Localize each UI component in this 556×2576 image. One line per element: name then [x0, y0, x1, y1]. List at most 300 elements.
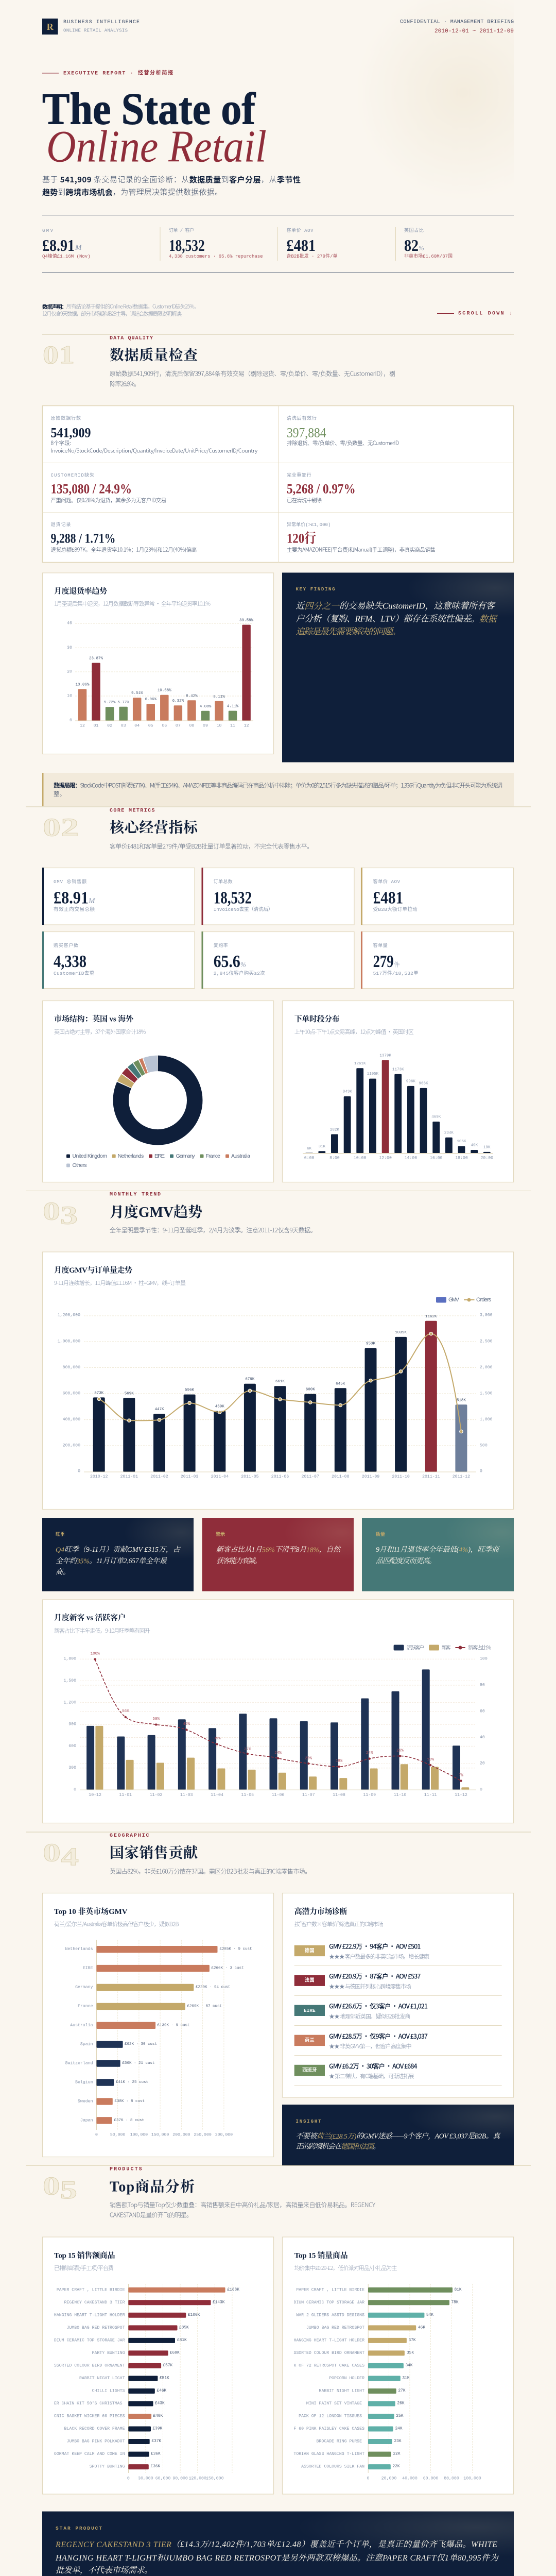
x axis labels: 200,000	[172, 2132, 190, 2137]
callout: star product	[42, 2512, 514, 2576]
bar value labels: 24K	[395, 2427, 403, 2431]
product labels: BROCADE RING PURSE	[317, 2439, 362, 2444]
left axis labels: 600,000	[63, 1391, 80, 1396]
cell: raw rows: 原始数据行数	[50, 415, 81, 421]
bar value labels: £39K	[152, 2427, 163, 2431]
active customer bars	[86, 1669, 460, 1790]
x axis labels: 03	[121, 723, 126, 728]
bar value labels: 1173K	[392, 1067, 404, 1072]
cell: raw rows	[50, 415, 257, 454]
bar value labels: £37K · 8 cust	[114, 2119, 144, 2123]
market row: EIRE: ★★ 地理邻近英国，疑似B2B批发商	[329, 2012, 410, 2020]
donut legend: Others	[72, 1162, 86, 1168]
x axis labels: 50,000	[110, 2132, 125, 2137]
product labels: JUMBO BAG RED RETROSPOT	[66, 2326, 125, 2330]
chart legend: GMV	[448, 1297, 460, 1303]
GMV value labels: 953K	[366, 1342, 375, 1346]
cell: returns: 退货记录	[50, 521, 71, 528]
stat: AOV: 客单价 AOV	[286, 227, 314, 233]
insight card: peak season: 全年约35%。11月订单2,657单全年最	[56, 1557, 167, 1565]
market row: EIRE: EIRE	[304, 2008, 316, 2013]
orders line	[97, 1332, 463, 1433]
hero summary: 基于 541,909 条交易记录的全面诊断：从数据质量到客户分层，从季节性	[42, 174, 301, 184]
metric card: GMV: £8.91	[54, 888, 89, 908]
x axis labels: 2011-11	[422, 1475, 440, 1479]
y axis labels: 40	[67, 621, 72, 625]
bar value labels: £37K	[151, 2439, 162, 2444]
market row: France	[294, 1971, 502, 1996]
callout: key finding: 追踪是最先需要解决的问题。	[296, 626, 401, 637]
section heading: 4	[61, 1842, 79, 1871]
bar value labels: £51K	[160, 2376, 169, 2380]
left axis labels: 800,000	[63, 1365, 80, 1370]
x axis labels: 90,000	[172, 2476, 188, 2481]
bar value labels: £285K · 9 cust	[219, 1947, 252, 1952]
x axis labels	[95, 2132, 233, 2137]
x axis labels: 2011-10	[392, 1475, 410, 1479]
market row: EIRE: GMV £26.6万 · 仅3客户 · AOV £1,021	[329, 2001, 428, 2011]
section heading: 02	[43, 812, 79, 841]
chart heading: 月度新客 vs 活跃客户	[54, 1613, 126, 1622]
product labels: POPCORN HOLDER	[329, 2376, 364, 2381]
x axis labels: 11-01	[119, 1793, 132, 1798]
section heading	[43, 2167, 375, 2219]
right axis labels: 500	[480, 1444, 488, 1448]
GMV value labels: 679K	[245, 1378, 255, 1382]
bar value labels: 469K	[431, 1115, 441, 1119]
insight card: quality	[362, 1518, 514, 1591]
bar value labels: £139K · 9 cust	[158, 2023, 190, 2027]
bar value labels: 10.68%	[158, 689, 171, 693]
GMV value labels: 1162K	[425, 1315, 437, 1319]
chart heading	[54, 1014, 146, 1036]
section heading: 3	[60, 1200, 78, 1229]
chart legend: Orders	[476, 1297, 491, 1303]
country labels: Australia	[70, 2023, 93, 2028]
bar value labels: 35K	[407, 2351, 414, 2355]
bar value labels: 6.32%	[172, 699, 184, 703]
bar value labels: £100K	[188, 2313, 200, 2317]
right axis labels: 0	[480, 1788, 482, 1792]
right axis labels: 2,500	[480, 1340, 493, 1344]
product labels: RABBIT NIGHT LIGHT	[319, 2388, 364, 2394]
x axis labels: 100,000	[130, 2132, 148, 2137]
section heading: 0	[43, 1196, 56, 1225]
x axis labels: 10:00	[354, 1156, 367, 1160]
title	[42, 84, 267, 172]
bar value labels: £38K · 8 cust	[114, 2099, 145, 2104]
report meta: CONFIDENTIAL · MANAGEMENT BRIEFING	[400, 20, 514, 25]
section heading: CAKESTAND是量价齐飞的明星。	[110, 2210, 193, 2219]
chart legend	[394, 1643, 491, 1652]
chart heading: 1月圣诞后集中退货，12月数据截断导致异常 · 全年平均退货率10.1%	[54, 600, 211, 608]
x axis labels: 2011-07	[301, 1475, 319, 1479]
insight card: quality: 品匹配度反而更高。	[376, 1557, 436, 1565]
market row: Netherlands: GMV £28.5万 · 仅9客户 · AOV £3,037	[329, 2031, 428, 2041]
section heading: GEOGRAPHIC	[110, 1833, 149, 1839]
x axis labels	[89, 1793, 467, 1798]
cell: raw rows: 541,909	[50, 426, 91, 440]
ratio labels: 35%	[214, 1737, 221, 1741]
product labels: HANGING HEART T-LIGHT HOLDER	[54, 2313, 125, 2317]
chart heading: 月度GMV与订单量走势	[54, 1265, 132, 1275]
metric card: GMV: M	[88, 897, 96, 905]
left axis labels: 200,000	[63, 1444, 80, 1448]
chart heading: 均价集中£0.29-£2，低价派对用品/小礼品为主	[294, 2264, 397, 2272]
x axis labels: 05	[148, 723, 153, 728]
country labels: Japan	[80, 2118, 93, 2123]
right axis labels: 1,000	[480, 1417, 493, 1422]
brand text: ONLINE RETAIL ANALYSIS	[63, 28, 128, 33]
bar value labels: 1261K	[354, 1062, 366, 1066]
x axis labels: 11-09	[363, 1793, 376, 1798]
insight card: peak season: 旺季	[56, 1531, 65, 1537]
x axis labels	[127, 2476, 224, 2481]
bars	[368, 2284, 453, 2473]
x axis labels: 11-02	[150, 1793, 162, 1798]
section heading: 销售额Top与销量Top仅少数重叠：高销售额来自中高价礼品/家居，高销量来自低价易耗品。REGENCY	[110, 2200, 375, 2209]
left axis labels: 0	[74, 1788, 76, 1792]
bar value labels: 39.58%	[239, 619, 254, 623]
ratio labels: 20%	[305, 1757, 312, 1761]
cell: missing customer id: 严重问题。仅0.28%为退货，其余多为无客户ID交易	[50, 497, 166, 504]
right axis labels: 0	[480, 1469, 482, 1473]
panel: market structure donut	[42, 1001, 274, 1182]
donut legend: Germany	[176, 1153, 195, 1159]
cell: missing customer id: 135,080 / 24.9%	[50, 481, 132, 497]
eyebrow: EXECUTIVE REPORT · 经营分析简报	[63, 69, 173, 76]
panel: top 15 by revenue	[42, 2237, 274, 2494]
GMV value labels	[94, 1315, 466, 1412]
y axis labels	[67, 621, 72, 723]
x axis labels: 06	[162, 723, 167, 728]
cell: abnormal prices: 异常单价(>£1,000)	[287, 521, 331, 528]
x axis labels: 40,000	[402, 2476, 418, 2481]
cell: abnormal prices: 120行	[287, 531, 316, 546]
insight card: warning: 新客占比从1月56%下滑至8月18%，自然	[216, 1546, 341, 1554]
insight card: quality: 质量	[376, 1531, 385, 1537]
logo mark: R	[47, 22, 54, 32]
stat: AOV	[286, 227, 338, 259]
product labels: JUMBO BAG RED RETROSPOT	[306, 2326, 364, 2330]
new customer ratio line	[94, 1658, 462, 1782]
bar value labels: £36K	[150, 2465, 161, 2469]
product labels: WAR 2 GLIDERS ASSTD DESIGNS	[296, 2313, 364, 2317]
x axis labels: 08	[189, 723, 194, 728]
chart heading: Top 15 销量商品	[294, 2250, 348, 2260]
metric card: customers: 4,338	[54, 952, 86, 971]
right axis labels: 40	[480, 1735, 485, 1740]
section heading: 0	[43, 1838, 56, 1867]
GMV value labels: 600K	[306, 1388, 315, 1392]
x axis labels: 11-04	[211, 1793, 223, 1798]
section heading: Top商品分析	[110, 2178, 195, 2195]
insight card: warning: 获客能力衰减。	[216, 1557, 262, 1565]
chart heading: 新客占比下半年走低，9-10月旺季略有回升	[54, 1626, 150, 1635]
x axis labels: 20,000	[381, 2476, 396, 2481]
brand text	[63, 20, 140, 33]
callout: insight: INSIGHT	[296, 2119, 321, 2124]
metric card: orders: 订单总数	[214, 878, 233, 885]
donut legend: EIRE	[154, 1153, 165, 1159]
x axis labels: 2011-08	[332, 1475, 350, 1479]
product labels: SPOTTY BUNTING	[90, 2465, 125, 2469]
chart heading	[54, 2250, 115, 2272]
market row: Netherlands: ★★ 非英GMV第一，但客户高度集中	[329, 2042, 412, 2050]
y axis labels: 10	[67, 693, 72, 699]
market row: France: 法国	[305, 1977, 315, 1984]
x axis labels: 6:00	[304, 1156, 315, 1160]
product labels: CHILLI LIGHTS	[92, 2388, 125, 2394]
insight card: peak season: 高。	[56, 1568, 70, 1577]
metric card: repurchase: 2,845位客户购买≥2次	[214, 970, 265, 976]
x axis labels: 12	[244, 723, 249, 728]
market row: EIRE	[294, 2001, 502, 2026]
bar value labels: £57K	[163, 2364, 173, 2368]
x axis labels: 0	[127, 2476, 130, 2481]
bar value labels: £229K · 94 cust	[196, 1986, 231, 1990]
x axis labels: 2011-04	[211, 1475, 229, 1479]
metric card: repurchase	[202, 931, 354, 989]
y axis labels: 0	[70, 718, 72, 723]
market row: Germany	[294, 1941, 502, 1966]
section heading: PRODUCTS	[110, 2167, 142, 2172]
left axis labels: 1,000,000	[58, 1340, 80, 1344]
cell: raw rows: InvoiceNo/StockCode/Description/Quantity/InvoiceDate/UnitPrice/CustomerID/Country	[50, 447, 257, 454]
panel: top 15 by volume	[282, 2237, 514, 2494]
country labels: Germany	[75, 1985, 93, 1990]
x axis labels: 2011-12	[453, 1475, 470, 1479]
section heading: DATA QUALITY	[110, 336, 153, 341]
product labels: ER CHAIN KIT 50'S CHRISTMAS	[54, 2401, 123, 2406]
GMV value labels: 573K	[94, 1391, 104, 1395]
bar value labels: £209K · 87 cust	[187, 2004, 222, 2008]
bar value labels: 4.08%	[200, 705, 212, 709]
stat: AOV: 含B2B批发 · 279件/单	[286, 253, 338, 259]
metric card: AOV: 受B2B大额订单拉动	[373, 906, 418, 912]
bar value labels: 25K	[396, 2414, 404, 2418]
bar value labels: £41K · 25 cust	[116, 2080, 148, 2084]
chart heading	[294, 1014, 414, 1036]
country labels: Sweden	[78, 2098, 93, 2104]
left axis labels: 900	[68, 1722, 76, 1727]
x axis labels: 11-08	[333, 1793, 345, 1798]
market row: Spain: ★ 第二梯队，有C端基础，可渐进拓展	[329, 2072, 414, 2080]
metric card: GMV	[42, 868, 195, 925]
section 04: geographic	[26, 1832, 531, 2165]
bar value labels: 1105K	[367, 1072, 379, 1076]
ratio labels: 18%	[336, 1759, 343, 1763]
x axis labels: 04	[134, 723, 140, 728]
ratio labels: 24%	[366, 1751, 373, 1755]
donut chart	[121, 1063, 195, 1137]
right axis labels: 60	[480, 1709, 485, 1714]
GMV value labels: 569K	[125, 1392, 134, 1396]
x axis labels: 01	[94, 723, 99, 728]
country labels: France	[78, 2004, 93, 2009]
hero summary	[42, 174, 301, 197]
section heading: MONTHLY TREND	[110, 1192, 161, 1197]
x axis labels: 150,000	[206, 2476, 224, 2481]
market row: Spain	[294, 2061, 502, 2086]
product labels: HANGING HEART T-LIGHT HOLDER	[293, 2338, 364, 2343]
market row: France: GMV £20.9万 · 87客户 · AOV £537	[329, 1971, 421, 1980]
cell: missing customer id	[50, 472, 166, 504]
left axis labels: 1,800	[63, 1657, 76, 1662]
metric card: orders: 18,532	[214, 888, 252, 908]
stat: GMV: Q4峰值£1.16M (Nov)	[42, 253, 91, 259]
product labels: OORMAT KEEP CALM AND COME IN	[54, 2452, 125, 2456]
panel: order hour distribution	[282, 1001, 514, 1182]
section heading: 客单价£481和客单量279件/单受B2B批量订单显著拉动，不完全代表零售水平。	[110, 842, 313, 851]
country labels: Switzerland	[65, 2061, 93, 2066]
cell: cleaned rows: 排除退货、零/负单价、零/负数量、无CustomerID	[287, 439, 399, 447]
product labels: F 60 PINK PAISLEY CAKE CASES	[293, 2427, 364, 2431]
section 01: data quality	[42, 334, 514, 807]
left axis labels: 300	[68, 1766, 76, 1770]
donut legend: United Kingdom	[72, 1153, 107, 1159]
cell: duplicates	[287, 472, 356, 504]
ratio labels: 7%	[459, 1773, 463, 1777]
callout: key finding: 户分析（复购、RFM、LTV）都存在系统性偏差。数据	[296, 614, 498, 623]
metric card: customers: 购买客户数	[54, 942, 78, 948]
x axis labels: 09	[203, 723, 208, 728]
ratio labels: 50%	[152, 1717, 160, 1721]
bar value labels: 46K	[418, 2326, 425, 2330]
x axis labels: 2011-03	[181, 1475, 198, 1479]
x axis labels: 2010-12	[90, 1475, 108, 1479]
bar value labels: 22K	[393, 2452, 401, 2456]
callout: insight: 不要被荷兰(£28.5万)的GMV迷惑——9个客户，AOV £3,037是B2B。真	[296, 2132, 501, 2140]
product labels: TORIAN GLASS HANGING T-LIGHT	[293, 2452, 364, 2456]
country labels	[65, 1946, 93, 2123]
bar value labels: 234K	[444, 1131, 454, 1135]
section 05: products	[26, 2165, 531, 2576]
metric card: customers	[42, 931, 195, 989]
right axis labels: 3,000	[480, 1313, 493, 1318]
market row: Netherlands	[294, 2031, 502, 2056]
chart legend	[436, 1297, 491, 1303]
x axis labels: 60,000	[155, 2476, 170, 2481]
bar value labels: 8.42%	[186, 694, 198, 698]
chart legend: 新客占比%	[468, 1643, 491, 1652]
bar value labels: 8.11%	[213, 695, 225, 699]
chart heading: 荷兰/爱尔兰/Australia客单价极高但客户极少，疑似B2B	[54, 1920, 179, 1928]
left axis labels: 600	[68, 1744, 76, 1749]
panel heading: 按"客户数×客单价"筛选真正的C端市场	[294, 1920, 384, 1928]
chart heading: 市场结构：英国 vs 海外	[54, 1014, 134, 1024]
bar value labels	[307, 1054, 491, 1151]
GMV value labels: 1039K	[395, 1331, 407, 1335]
logo mark	[42, 19, 58, 35]
stat: UK share: 非英市场£1.60M/37国	[404, 253, 453, 259]
x axis labels: 8:00	[329, 1156, 340, 1160]
donut legend: Australia	[231, 1153, 250, 1159]
cell: returns: 9,288 / 1.71%	[50, 531, 115, 546]
market row: Germany: GMV £22.9万 · 94客户 · AOV £501	[329, 1941, 421, 1951]
bar value labels: 282K	[330, 1128, 339, 1132]
GMV value labels: 447K	[154, 1408, 164, 1412]
bar value labels: 23.87%	[89, 657, 103, 661]
cell: duplicates: 完全重复行	[287, 472, 311, 478]
product labels: ASSORTED COLOURS SILK FAN	[301, 2465, 364, 2469]
x axis labels: 2011-06	[271, 1475, 289, 1479]
chart heading	[54, 586, 211, 608]
chart heading: Top 10 非英市场GMV	[54, 1907, 128, 1916]
callout: star product: 批发单，不代表市场需求。	[56, 2566, 152, 2575]
callout: key finding: 近四分之一的交易缺失CustomerID，这意味着所有客	[296, 601, 496, 611]
x axis labels: 2011-09	[362, 1475, 379, 1479]
x axis labels: 100,000	[463, 2476, 481, 2481]
product labels: JUMBO BAG PINK POLKADOT	[66, 2439, 125, 2444]
chart heading: 9-11月连续增长，11月峰值£1.16M · 柱=GMV，线=订单量	[54, 1279, 186, 1287]
bar value labels: 4.11%	[227, 705, 239, 709]
insight card: peak season	[42, 1518, 194, 1591]
data disclaimer: 数据声明：所有结论基于提供的Online Retail数据集。CustomerID缺失25%，	[42, 303, 199, 310]
panel: GMV and orders chart	[42, 1252, 514, 1510]
product labels: RABBIT NIGHT LIGHT	[79, 2376, 125, 2381]
callout: data limits: 数据局限：StockCode中POST(邮费£77K)、M(手工£54K)、AMAZONFEE等非商品编码已在商品分析中排除；单价为0的2,515行多为缺失描述的赠品/坏单；1,336行Quantity为负但非C开头可能为系统调	[54, 782, 502, 790]
x axis labels: 18:00	[455, 1156, 468, 1160]
x axis labels: 11-05	[241, 1793, 254, 1798]
chart heading: Top 15 销售额商品	[54, 2250, 115, 2260]
donut legend: France	[206, 1153, 220, 1159]
section heading: 原始数据541,909行，清洗后保留397,884条有效交易（剔除退货、零/负单价、零/负数量、无CustomerID），剔	[110, 369, 395, 378]
stat: orders: 订单 / 客户	[169, 227, 194, 233]
x axis labels: 300,000	[215, 2132, 233, 2137]
x axis labels: 2011-02	[150, 1475, 168, 1479]
panel heading: 高潜力市场诊断	[294, 1907, 348, 1916]
bar value labels: £69K	[170, 2351, 180, 2355]
bar value labels: 31K	[319, 1145, 326, 1149]
x axis labels: 0	[95, 2132, 98, 2137]
x axis labels: 11-06	[272, 1793, 284, 1798]
right axis labels: 20	[480, 1761, 485, 1766]
metric card: basket size: 客单量	[373, 942, 388, 948]
metric card: customers: CustomerID去重	[54, 970, 94, 976]
product labels: PARTY BUNTING	[92, 2351, 125, 2355]
bar value labels: 22K	[392, 2465, 400, 2469]
metric card: orders	[202, 868, 354, 925]
bar value labels: £56K · 21 cust	[123, 2061, 155, 2065]
stat: GMV	[42, 228, 91, 259]
bar value labels: £143K	[213, 2300, 225, 2304]
chart heading: 下单时段分布	[294, 1014, 340, 1024]
chart heading: 已排除邮费/手工项/平台费	[54, 2264, 114, 2272]
title: Online Retail	[46, 122, 267, 172]
left axis labels	[63, 1657, 76, 1792]
metric card: repurchase: 65.6	[214, 952, 240, 971]
insight card: warning	[202, 1518, 354, 1591]
bar value labels: 23K	[394, 2439, 402, 2444]
product labels: DIUM CERAMIC TOP STORAGE JAR	[54, 2338, 125, 2343]
product labels: MINI PAINT SET VINTAGE	[306, 2401, 362, 2406]
stat: orders	[169, 227, 263, 259]
stat: UK share: 82	[404, 236, 419, 255]
x axis labels	[304, 1156, 493, 1160]
section heading	[43, 336, 395, 388]
x axis labels: 30,000	[138, 2476, 153, 2481]
stat: GMV: M	[75, 244, 82, 252]
cell: raw rows: 8个字段:	[50, 439, 71, 447]
cell: returns: 退货总额£897K，全年退货率10.1%；1月(23%)和12月(40%)偏高	[50, 546, 197, 553]
hero section	[42, 0, 514, 317]
bar value labels: 27K	[398, 2389, 406, 2393]
GMV bars	[84, 1321, 476, 1472]
x axis labels: 12	[80, 723, 85, 728]
x axis labels: 20:00	[481, 1156, 493, 1160]
chart heading	[294, 2250, 397, 2272]
